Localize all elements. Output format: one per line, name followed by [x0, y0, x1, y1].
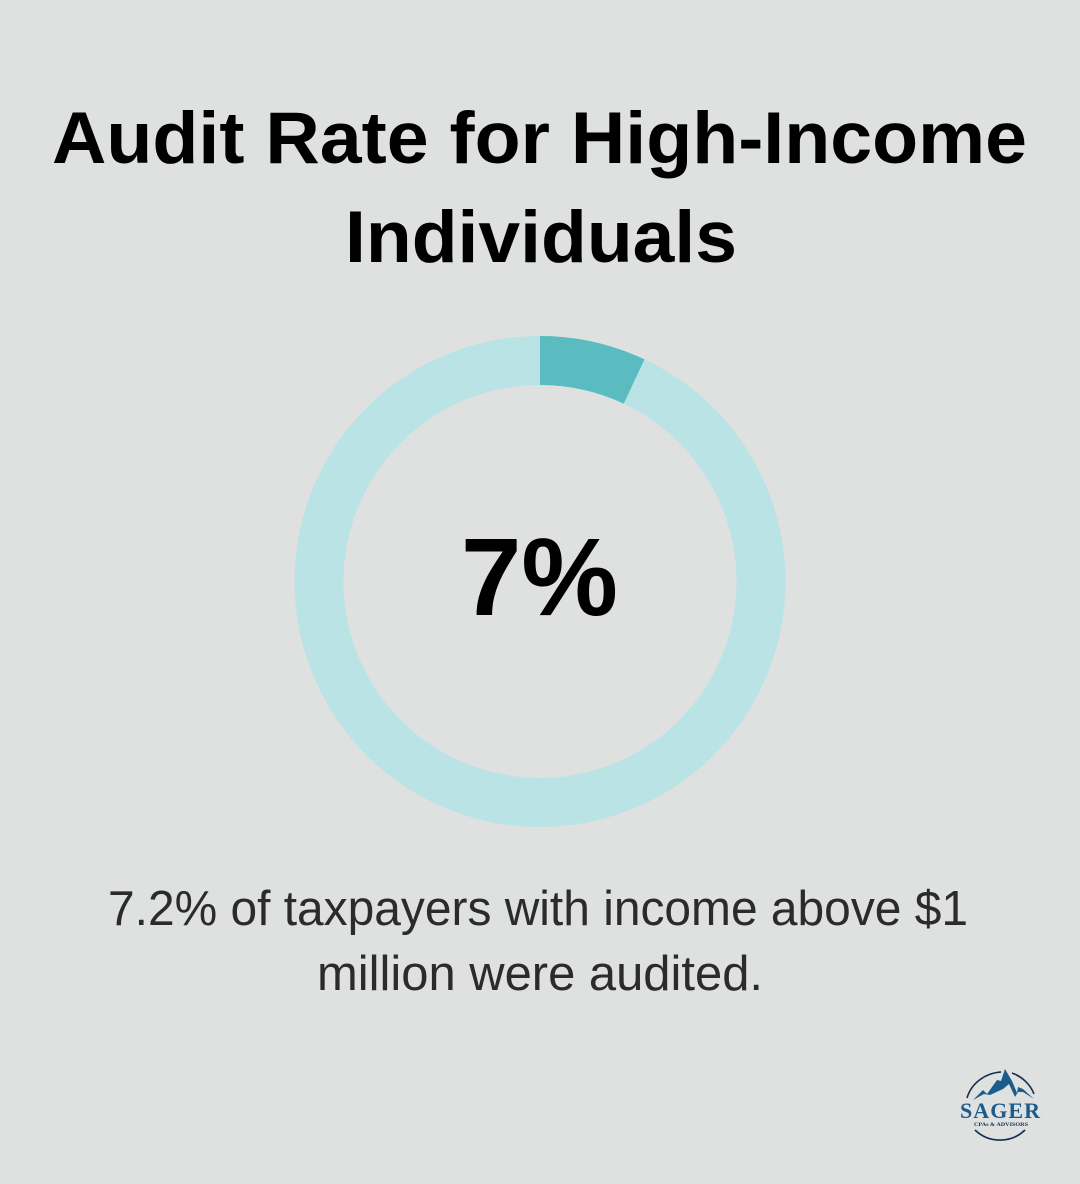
logo ring top: [967, 1072, 1001, 1098]
center value: 7%: [461, 516, 618, 639]
title: Individuals: [345, 197, 737, 278]
description text: million were audited.: [317, 947, 763, 1001]
logo tagline: CPAs & ADVISORS: [974, 1122, 1028, 1128]
logo mountains: [973, 1069, 1034, 1100]
donut track: [319, 360, 761, 802]
title: [52, 98, 1027, 278]
title: Audit Rate for High-Income: [52, 98, 1027, 179]
donut highlighted segment: 7%: [540, 336, 644, 404]
logo wordmark: SAGER: [960, 1098, 1041, 1123]
description text: [108, 882, 968, 1001]
logo ring bottom: [975, 1130, 1025, 1140]
description text: 7.2% of taxpayers with income above $1: [108, 882, 968, 936]
logo: Sager CPAs & Advisors: [960, 1069, 1041, 1140]
donut chart: [319, 336, 761, 802]
